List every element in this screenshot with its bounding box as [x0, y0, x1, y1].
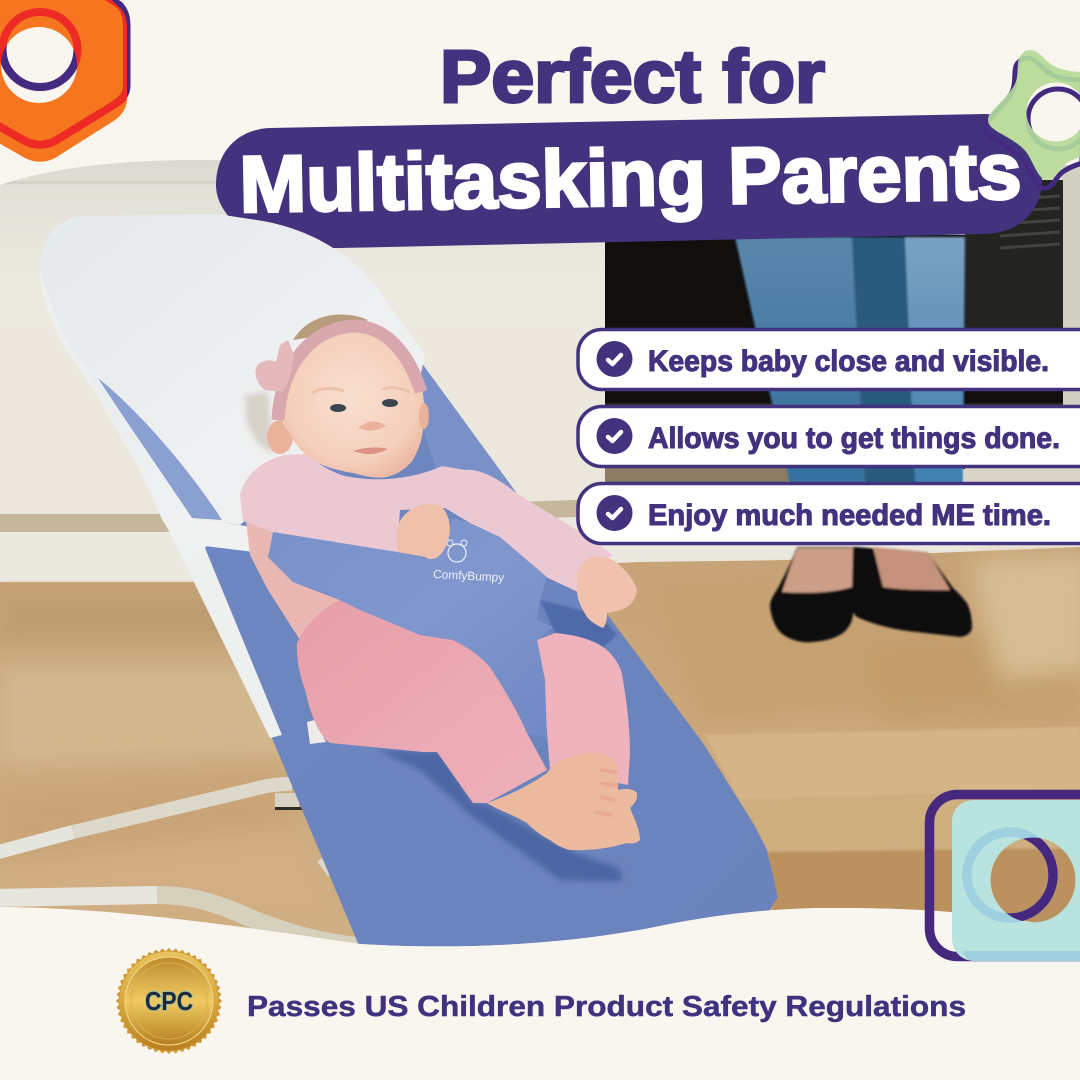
- check icon 1: [596, 341, 632, 377]
- callout: get things done: [578, 406, 1080, 466]
- baby mouth: [353, 447, 388, 454]
- baby hand near chest: [397, 504, 450, 559]
- product: baby bouncer: [40, 214, 778, 960]
- baby toes: [595, 770, 618, 815]
- side frame white edge: [40, 272, 282, 738]
- baby left leg pants: [297, 600, 547, 803]
- callout: get things done: Allows you to get things done.: [648, 422, 1060, 455]
- check icon 2: [596, 418, 632, 454]
- decorative icon: orange hexagon nut: [0, 0, 127, 162]
- headband: [278, 326, 421, 420]
- small white tag: [307, 720, 326, 744]
- baby open hand: [577, 557, 637, 628]
- baby eyes: [312, 388, 410, 412]
- check icon 3: [596, 495, 632, 531]
- head shadow on mesh: [245, 392, 272, 455]
- bouncer seat blue fabric: [205, 358, 778, 960]
- baby ear: [267, 420, 293, 454]
- parent legs in jeans: [735, 237, 965, 484]
- callout: me time: Enjoy much needed ME time.: [648, 499, 1051, 532]
- room photo background: [0, 160, 1080, 946]
- CPC gold seal: CPC: [145, 986, 193, 1016]
- harness logo: ComfyBumpy: [433, 567, 504, 585]
- seat shadow under leg: [377, 750, 622, 882]
- bouncer upper seat highlight: [421, 365, 516, 493]
- safety regulations text: Passes US Children Product Safety Regulations: [247, 991, 966, 1023]
- baby sweater: [240, 454, 613, 592]
- baby head: [280, 332, 424, 478]
- wall: [0, 160, 1080, 560]
- floor: [0, 547, 1080, 945]
- baby: [240, 315, 640, 850]
- bouncer mesh back: [40, 214, 425, 525]
- right ear: [419, 403, 429, 429]
- baby hair: [293, 315, 368, 340]
- harness logo: [433, 540, 504, 585]
- harness: [268, 518, 553, 738]
- decorative icon: green star teether: [985, 50, 1080, 188]
- banner with title: Multitasking Parents: Multitasking Parents: [239, 126, 1022, 229]
- parent feet and shoes: [770, 547, 972, 642]
- callout: keeps baby close: Keeps baby close and visible.: [648, 345, 1049, 378]
- baby foot: [487, 753, 640, 850]
- baby torso under harness: [246, 521, 340, 640]
- baby right leg: [537, 633, 630, 785]
- bouncer frame legs: [0, 784, 358, 946]
- decorative icon: teal rounded square: [930, 794, 1080, 961]
- callout: me time: [578, 484, 1080, 544]
- oven dark cabinet: [605, 165, 1080, 510]
- CPC gold seal: [116, 948, 222, 1054]
- title: Perfect for: Perfect for: [440, 35, 825, 118]
- seat shadow under arm: [540, 600, 617, 650]
- callout: keeps baby close: [578, 330, 1080, 390]
- blue wedge under mesh: [98, 378, 222, 520]
- headband bow: [255, 340, 294, 392]
- strap buckle: [163, 518, 273, 554]
- bottom cream wave: [0, 907, 1080, 1080]
- wall upper shelf shadow: [0, 181, 220, 184]
- baby nose: [358, 421, 386, 431]
- baseboard: [0, 500, 732, 582]
